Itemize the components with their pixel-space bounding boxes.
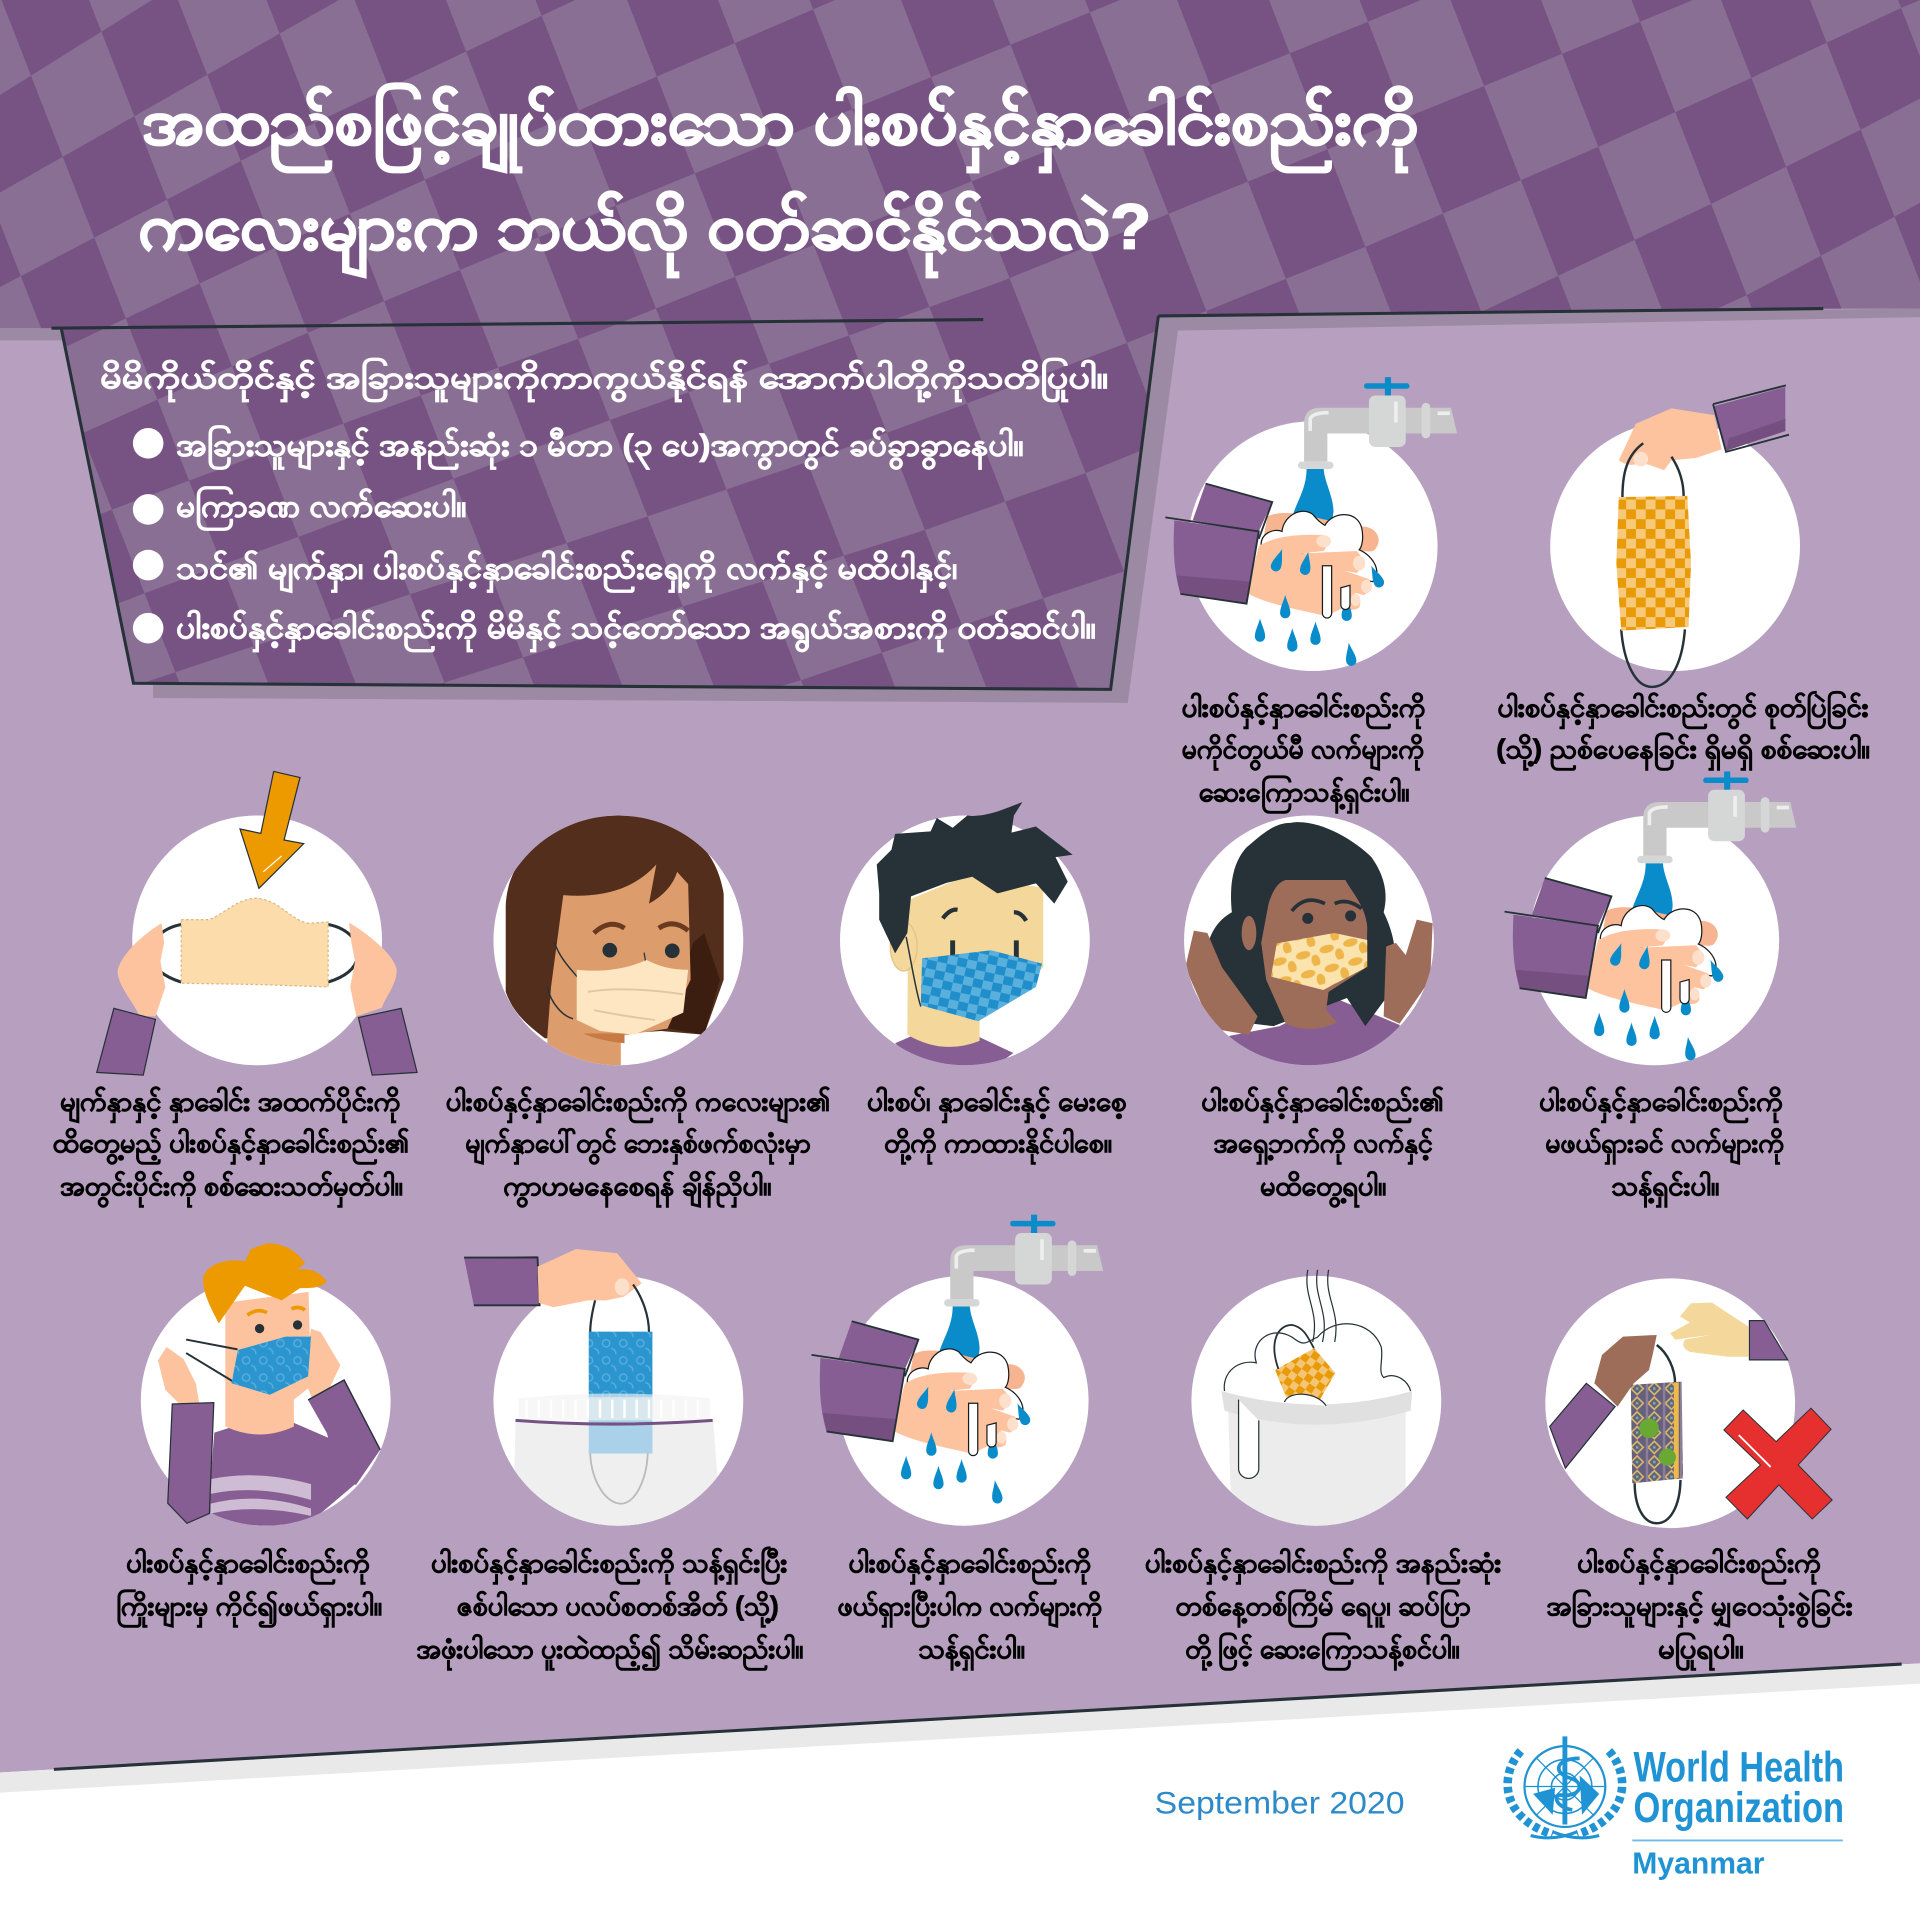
rim bbox=[1221, 1391, 1412, 1425]
mask bbox=[181, 898, 328, 987]
panel: protective tips: မကြာခဏ လက်ဆေးပါ။ bbox=[176, 487, 467, 532]
caption: wash hands after removing bbox=[838, 1548, 1102, 1671]
mask loop bbox=[1274, 1325, 1314, 1369]
caption: wash hands before touching: ပါးစပ်နှင့်နှာခေါင်းစည်းကို bbox=[1182, 692, 1425, 729]
panel: protective tips bbox=[51, 309, 1823, 689]
caption: wash hands before removing: ပါးစပ်နှင့်နှာခေါင်းစည်းကို bbox=[1539, 1087, 1783, 1124]
caption: identify inside and top of mask: အတွင်းပိုင်းကို စစ်ဆေးသတ်မှတ်ပါ။ bbox=[60, 1171, 403, 1208]
caption: wash hands before removing: မဖယ်ရှားခင် လက်များကို bbox=[1545, 1128, 1784, 1165]
eyes and brows bbox=[943, 910, 1026, 921]
steam bbox=[1307, 1270, 1336, 1342]
caption: cover mouth, nose and chin: ပါးစပ်၊ နှာခေါင်းနှင့် မေးစေ့ bbox=[867, 1087, 1127, 1124]
ear loops bbox=[151, 924, 359, 982]
checkered header background bbox=[0, 0, 1920, 688]
sleeve of receiver bbox=[1749, 1321, 1788, 1360]
mask bbox=[231, 1337, 311, 1395]
icon: washing hands under tap, before handling bbox=[1165, 377, 1457, 667]
hand bbox=[538, 1249, 642, 1307]
caption: remove by the straps bbox=[116, 1548, 382, 1628]
caption: adjust mask so there are no gaps: ပါးစပ်နှင့်နှာခေါင်းစည်းကို ကလေးများ၏ bbox=[446, 1086, 830, 1124]
icon: brown-haired child wearing cream mask bbox=[506, 816, 724, 1078]
caption: cover mouth, nose and chin bbox=[867, 1087, 1127, 1165]
caption: adjust mask so there are no gaps bbox=[446, 1086, 830, 1208]
icon: do not share masks bbox=[1550, 1303, 1832, 1523]
caption: remove by the straps: ကြိုးများမှ ကိုင်၍ဖယ်ရှားပါ။ bbox=[116, 1589, 382, 1628]
soap foam bbox=[1224, 1324, 1411, 1391]
tip lines: အခြားသူများနှင့် အနည်းဆုံး ၁ မီတာ (၃ ပေ)အကွာတွင် ခပ်ခွာခွာနေပါ။ bbox=[176, 426, 1024, 471]
bucket body bbox=[1228, 1409, 1406, 1526]
bottom dark rule bbox=[54, 1664, 1902, 1769]
mask bbox=[1271, 933, 1367, 990]
WHO wordmark bbox=[1632, 1744, 1844, 1880]
caption: wash hands before removing: သန့်ရှင်းပါ။ bbox=[1611, 1171, 1719, 1208]
title bbox=[138, 81, 1418, 279]
grey footer shadow band bbox=[0, 1663, 1920, 1793]
caption: wash hands before touching: ဆေးကြောသန့်ရှင်းပါ။ bbox=[1199, 775, 1409, 814]
hair bbox=[203, 1243, 327, 1323]
WHO wordmark: Myanmar bbox=[1632, 1846, 1765, 1880]
hair bbox=[877, 802, 1073, 953]
caption: wash daily with hot water and soap: တစ်နေ့တစ်ကြိမ် ရေပူ၊ ဆပ်ပြာ bbox=[1176, 1589, 1471, 1628]
caption: do not share mask: အခြားသူများနှင့် မျှဝေသုံးစွဲခြင်း bbox=[1547, 1589, 1853, 1628]
icon: girl with floral mask raising hands bbox=[1185, 822, 1433, 1078]
hands bbox=[1185, 931, 1258, 1035]
mask bbox=[1631, 1382, 1683, 1483]
arrow bbox=[240, 771, 304, 888]
drip bbox=[1239, 1400, 1259, 1478]
caption: check mask for damage bbox=[1496, 690, 1870, 771]
face and neck bbox=[1261, 880, 1367, 1029]
caption: identify inside and top of mask bbox=[53, 1087, 409, 1208]
sleeve of giver bbox=[1550, 1383, 1615, 1468]
WHO wordmark: World Health bbox=[1633, 1744, 1844, 1792]
right sleeve bbox=[308, 1380, 380, 1485]
caption: wash daily with hot water and soap bbox=[1145, 1548, 1501, 1671]
title: ကလေးများက ဘယ်လို ဝတ်ဆင်နိုင်သလဲ? bbox=[138, 191, 1151, 279]
caption: identify inside and top of mask: ထိတွေ့မည့် ပါးစပ်နှင့်နှာခေါင်းစည်း၏ bbox=[53, 1127, 409, 1165]
upper loop bbox=[590, 1284, 649, 1332]
caption: do not touch the front of the mask: မထိတွေ့ရပါ။ bbox=[1260, 1171, 1386, 1208]
caption: cover mouth, nose and chin: တို့ကို ကာထားနိုင်ပါစေ။ bbox=[884, 1128, 1112, 1165]
caption: store in sealed bag: အဖုံးပါသော ပူးထဲထည့်၍ သိမ်းဆည်းပါ။ bbox=[416, 1634, 803, 1671]
yellow hand bbox=[1670, 1303, 1749, 1357]
hair bbox=[506, 816, 724, 1038]
panel heading: မိမိကိုယ်တိုင်နှင့် အခြားသူများကိုကာကွယ်နိုင်ရန် အောက်ပါတို့ကိုသတိပြုပါ။ bbox=[100, 358, 1108, 403]
hands bbox=[158, 1347, 202, 1420]
caption: identify inside and top of mask: မျက်နှာနှင့် နှာခေါင်း အထက်ပိုင်းကို bbox=[60, 1087, 400, 1124]
ear strap bbox=[547, 943, 579, 1019]
hands bbox=[118, 923, 165, 1016]
sweater bbox=[208, 1423, 355, 1526]
icon: blond boy removing blue mask by straps bbox=[158, 1243, 380, 1526]
face and neck bbox=[547, 864, 691, 1078]
sleeves bbox=[97, 1008, 156, 1075]
mask bbox=[577, 960, 688, 1035]
purple content band bbox=[0, 294, 1920, 1772]
panel drop shadow bbox=[0, 309, 1920, 703]
caption: store in sealed bag: ပါးစပ်နှင့်နှာခေါင်းစည်းကို သန့်ရှင်းပြီး bbox=[431, 1546, 787, 1585]
panel: protective tips: သင်၏ မျက်နှာ၊ ပါးစပ်နှင့်နှာခေါင်းစည်းရှေ့ကို လက်နှင့် မထိပါနှင့်၊ bbox=[176, 550, 958, 594]
icon: arrow and hands holding beige mask bbox=[97, 771, 417, 1075]
caption: do not share mask: ပါးစပ်နှင့်နှာခေါင်းစည်းကို bbox=[1577, 1548, 1821, 1585]
caption: do not share mask: မပြုရပါ။ bbox=[1658, 1632, 1744, 1671]
icon: blue mask lowered into sealed bag bbox=[464, 1249, 718, 1526]
icon: washing hands under tap, after removing bbox=[811, 1215, 1103, 1504]
WHO emblem bbox=[1508, 1736, 1622, 1838]
caption: wash hands before touching: မကိုင်တွယ်မီ လက်များကို bbox=[1182, 734, 1424, 771]
virus blobs bbox=[1639, 1418, 1659, 1438]
neck and face bbox=[907, 876, 1043, 1047]
title: အထည်စဖြင့်ချုပ်ထားသော ပါးစပ်နှင့်နှာခေါင်းစည်းကို bbox=[142, 81, 1418, 173]
white icon circles bbox=[132, 421, 1800, 1528]
sleeve bbox=[464, 1256, 540, 1306]
caption: wash hands after removing: ဖယ်ရှားပြီးပါက လက်များကို bbox=[838, 1589, 1102, 1628]
caption: store in sealed bag bbox=[416, 1546, 803, 1671]
foam front bbox=[1284, 1394, 1326, 1406]
eyes and brows bbox=[602, 943, 617, 958]
caption: do not touch the front of the mask: အရှေ့ဘက်ကို လက်နှင့် bbox=[1213, 1128, 1433, 1165]
caption: wash hands before removing bbox=[1539, 1087, 1784, 1208]
lower loop bbox=[590, 1453, 648, 1504]
mask bbox=[1275, 1348, 1335, 1400]
icon: mask soaking in bucket of hot soapy water bbox=[1221, 1270, 1412, 1526]
eyes bbox=[255, 1324, 264, 1333]
caption: wash hands after removing: ပါးစပ်နှင့်နှာခေါင်းစည်းကို bbox=[849, 1548, 1091, 1585]
mask loops bbox=[1635, 1345, 1680, 1523]
shirt bbox=[1229, 1000, 1400, 1066]
icon: boy with blue checked mask bbox=[877, 802, 1073, 1078]
panel frame lines bbox=[51, 309, 1823, 689]
bag body bbox=[514, 1422, 718, 1526]
brown hand bbox=[1594, 1335, 1657, 1407]
caption: store in sealed bag: ဇစ်ပါသော ပလပ်စတစ်အိတ် (သို့) bbox=[457, 1591, 779, 1628]
caption: adjust mask so there are no gaps: ကွာဟမနေစေရန် ချိန်ညှိပါ။ bbox=[503, 1171, 771, 1208]
caption: check mask for damage: (သို့) ညစ်ပေနေခြင်း ရှိမရှိ စစ်ဆေးပါ။ bbox=[1496, 732, 1870, 771]
WHO wordmark: Organization bbox=[1633, 1784, 1844, 1832]
caption: do not touch the front of the mask: ပါးစပ်နှင့်နှာခေါင်းစည်း၏ bbox=[1201, 1086, 1444, 1124]
caption: check mask for damage: ပါးစပ်နှင့်နှာခေါင်းစည်းတွင် စုတ်ပြဲခြင်း bbox=[1498, 690, 1869, 729]
mask bbox=[589, 1332, 652, 1398]
date: September 2020 bbox=[1155, 1784, 1404, 1820]
mask bbox=[921, 950, 1042, 1021]
left sleeve bbox=[168, 1403, 214, 1523]
caption: adjust mask so there are no gaps: မျက်နှာပေါ်တွင် ဘေးနှစ်ဖက်စလုံးမှာ bbox=[465, 1128, 811, 1165]
hair bbox=[1206, 822, 1395, 1026]
bullet points bbox=[133, 428, 163, 459]
panel: protective tips: ပါးစပ်နှင့်နှာခေါင်းစည်းကို မိမိနှင့် သင့်တော်သော အရွယ်အစားကို ဝတ်ဆင်ပါ။ bbox=[176, 609, 1096, 653]
neck and face bbox=[225, 1292, 311, 1434]
caption: do not touch the front of the mask bbox=[1201, 1086, 1444, 1208]
eyes and brows bbox=[1302, 913, 1313, 924]
shirt bbox=[895, 1036, 1014, 1066]
ear bbox=[890, 922, 917, 971]
caption: wash hands before touching bbox=[1182, 692, 1425, 814]
caption: wash hands after removing: သန့်ရှင်းပါ။ bbox=[918, 1634, 1025, 1671]
icon: washing hands under tap, before removing bbox=[1505, 771, 1796, 1061]
caption: wash daily with hot water and soap: ပါးစပ်နှင့်နှာခေါင်းစည်းကို အနည်းဆုံး bbox=[1145, 1548, 1501, 1585]
ear strap bbox=[906, 937, 921, 1007]
straps bbox=[186, 1340, 238, 1381]
red cross bbox=[1724, 1408, 1832, 1519]
caption: remove by the straps: ပါးစပ်နှင့်နှာခေါင်းစည်းကို bbox=[126, 1548, 370, 1585]
bag zip bbox=[519, 1393, 710, 1420]
caption: wash daily with hot water and soap: တို့ဖြင့် ဆေးကြောသန့်စင်ပါ။ bbox=[1185, 1632, 1460, 1671]
icon: hand holding orange checked mask bbox=[1616, 385, 1789, 687]
caption: do not share mask bbox=[1547, 1548, 1853, 1671]
